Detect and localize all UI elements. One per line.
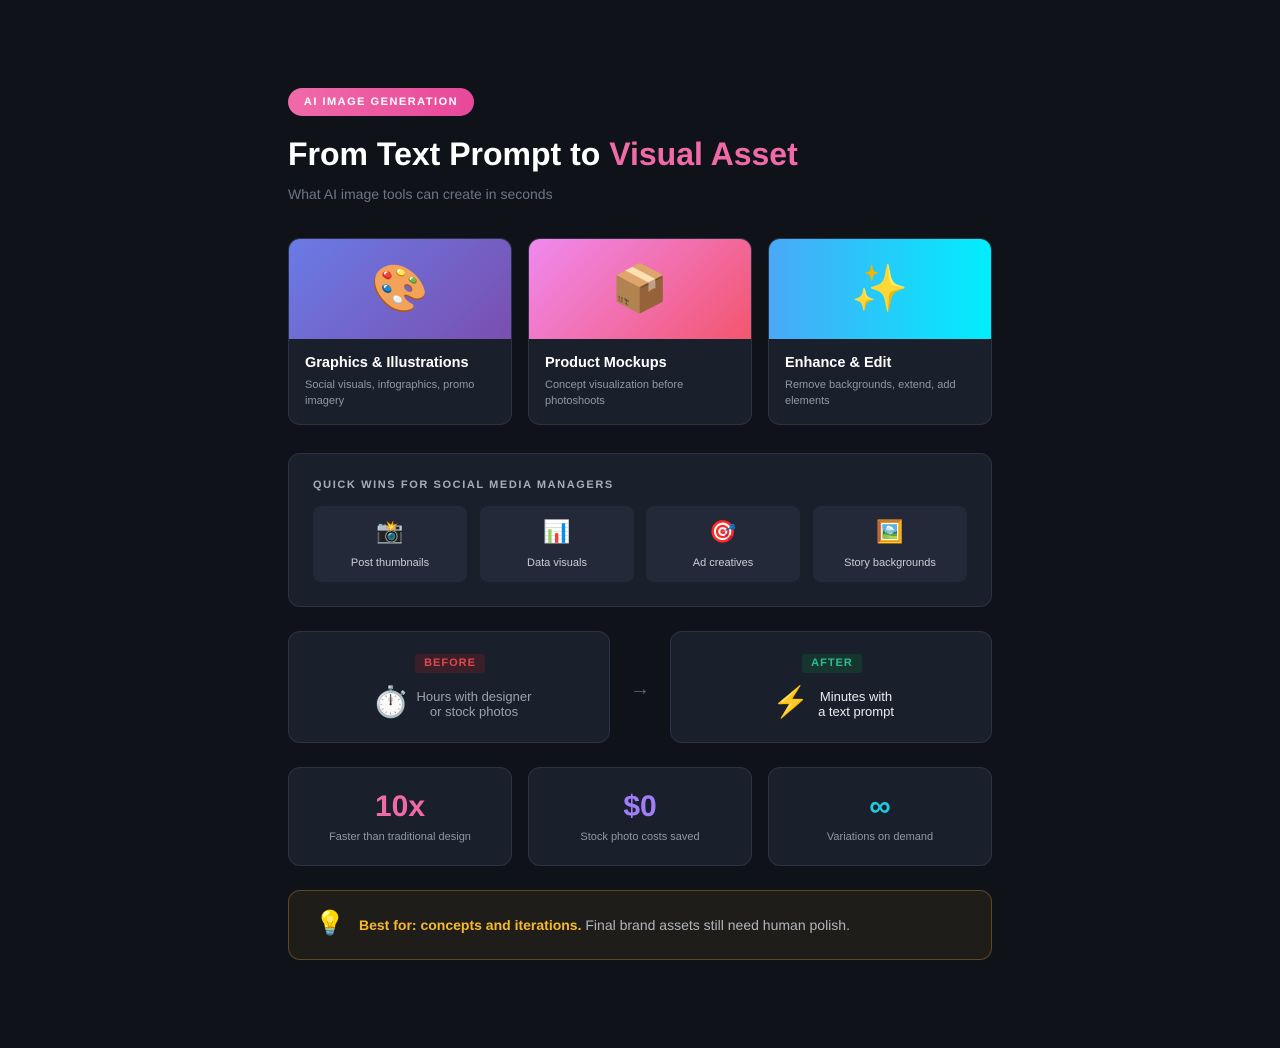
panel: before: Hours with designer [417, 689, 531, 704]
card: graphics [288, 238, 512, 425]
stat: infinity: ∞ [869, 790, 891, 823]
card: enhance: ✨ [851, 262, 909, 316]
card: enhance: Remove backgrounds, extend, add elements [785, 379, 956, 407]
item: ads: Ad creatives [693, 557, 753, 569]
panel: before [288, 631, 610, 743]
item: story: Story backgrounds [844, 557, 936, 569]
panel: after: AFTER [811, 657, 853, 669]
subtitle: What AI image tools can create in seconds [288, 186, 553, 202]
item: data [480, 506, 634, 582]
card: mockups [528, 238, 752, 425]
panel: before: or stock photos [430, 704, 518, 719]
stat: 10x: Faster than traditional design [329, 831, 471, 843]
arrow: → [630, 678, 650, 700]
stat: $0: $0 [623, 790, 657, 823]
heading: QUICK WINS FOR SOCIAL MEDIA MANAGERS [313, 479, 614, 491]
panel: after: ⚡ [772, 685, 809, 720]
badge [288, 88, 474, 116]
panel: after [670, 631, 992, 743]
stat: 10x: 10x [375, 790, 425, 823]
stat: infinity: Variations on demand [827, 831, 933, 843]
title: From Text Prompt to Visual Asset [288, 136, 798, 172]
stat: infinity [768, 767, 992, 866]
item: ads: 🎯 [709, 520, 737, 545]
card: graphics: Graphics & Illustrations [305, 355, 469, 371]
badge: AI IMAGE GENERATION [304, 96, 458, 108]
callout [288, 890, 992, 960]
card: mockups: Concept visualization before photoshoots [545, 379, 683, 407]
callout: Best for: concepts and iterations. Final brand assets still need human polish. [359, 917, 850, 933]
card: enhance: Enhance & Edit [785, 355, 891, 371]
item: thumbnails: 📸 [376, 520, 404, 545]
item: data: 📊 [543, 520, 571, 545]
item: story: 🖼️ [876, 520, 904, 545]
item: thumbnails [313, 506, 467, 582]
card: graphics: Social visuals, infographics, promo imagery [305, 379, 474, 407]
panel: before: ⏱️ [372, 685, 409, 720]
item: data: Data visuals [527, 557, 587, 569]
item: ads [646, 506, 800, 582]
card: mockups: Product Mockups [545, 355, 667, 371]
callout: 💡 [315, 909, 345, 937]
panel: quick wins [288, 453, 992, 607]
stat: $0: Stock photo costs saved [580, 831, 700, 843]
panel: after: a text prompt [818, 704, 894, 719]
panel: before: BEFORE [424, 657, 476, 669]
item: story [813, 506, 967, 582]
stat: $0 [528, 767, 752, 866]
card: enhance [768, 238, 992, 425]
card: graphics: 🎨 [371, 262, 429, 316]
panel: after: Minutes with [820, 689, 892, 704]
card: mockups: 📦 [611, 262, 669, 316]
item: thumbnails: Post thumbnails [351, 557, 429, 569]
stat: 10x [288, 767, 512, 866]
